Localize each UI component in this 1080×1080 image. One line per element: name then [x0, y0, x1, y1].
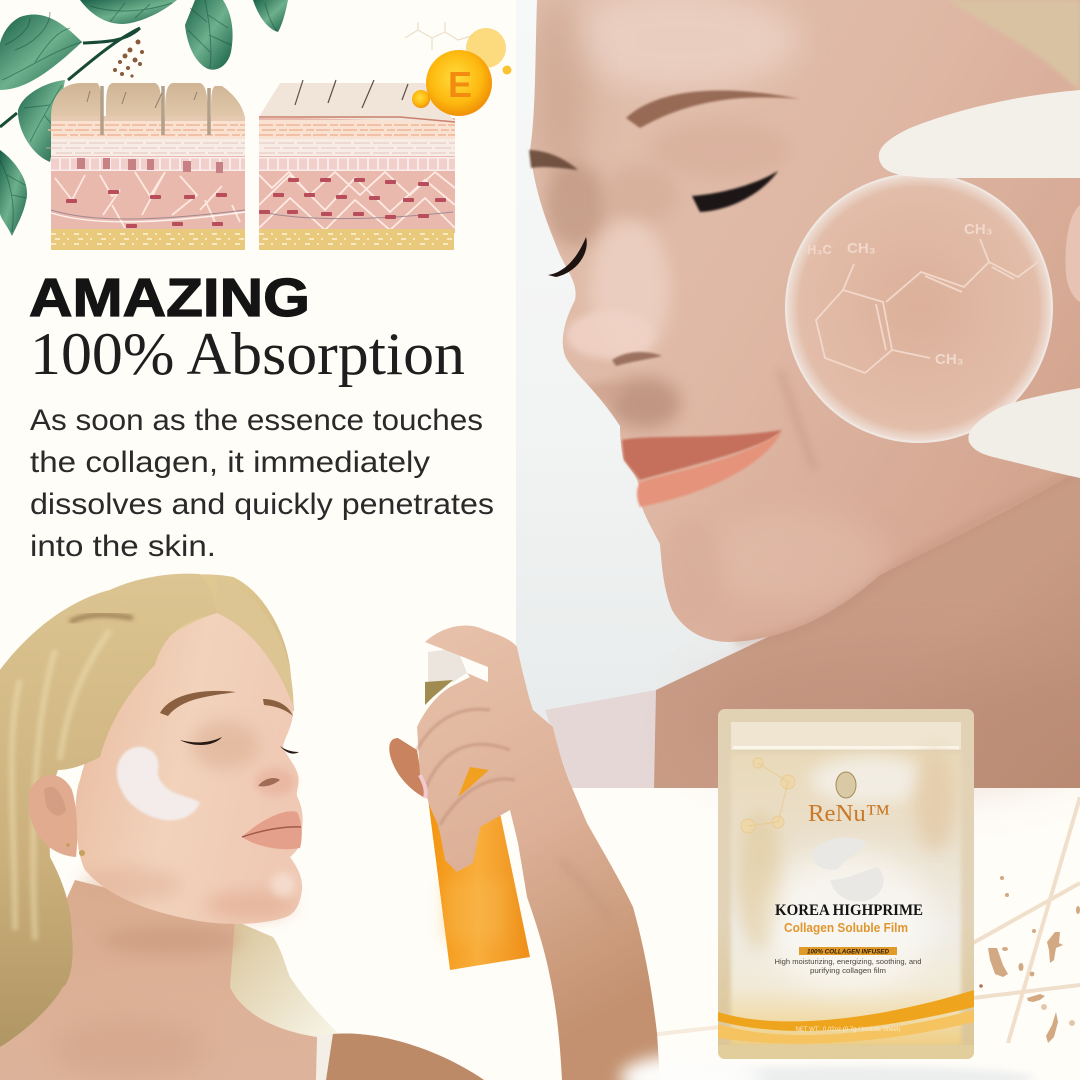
eye patches [812, 838, 866, 870]
jaw shadow line [735, 470, 1080, 642]
description: High moisturizing, energizing, soothing, and [774, 957, 922, 966]
hair back [0, 574, 294, 900]
brows and eyes [626, 91, 800, 128]
product pouch: purifying collagen film [810, 966, 886, 975]
lips [242, 811, 302, 849]
heading: 100% Absorption [30, 321, 465, 387]
face shading [530, 0, 890, 620]
body text: dissolves and quickly penetrates [30, 488, 494, 521]
product name: KOREA HIGHPRIME [775, 902, 923, 919]
hand and arm holding spray [389, 626, 660, 1080]
badge [799, 947, 897, 955]
heading: AMAZING [29, 268, 310, 328]
icon: vitamin E capsule: E [448, 64, 472, 105]
nostril [612, 352, 662, 366]
ear [28, 775, 77, 857]
face [75, 613, 303, 924]
decorative gold strokes and splatter [650, 797, 1080, 1043]
brows [160, 691, 236, 716]
net weight: NET WT.: 0.02oz (0.7g / Include Sheet) [796, 1026, 900, 1033]
product pouch [718, 709, 974, 1059]
skin diagram: after (restored) [259, 80, 455, 250]
lens: H₃C [807, 242, 832, 257]
photo: blonde woman applying spray [0, 574, 484, 1080]
gold waves [718, 990, 974, 1031]
leaf veins [0, 0, 277, 232]
tank strap [316, 1033, 333, 1080]
molecule graphic [741, 758, 795, 833]
hair front [0, 574, 217, 1047]
neck and shoulder [0, 880, 484, 1080]
neck [654, 460, 1080, 788]
cream patch [117, 747, 200, 820]
spray bottle [425, 648, 530, 970]
face shape [530, 0, 1080, 642]
botanical leaves [0, 0, 288, 236]
lobes [51, 83, 245, 121]
lens: CH₃ [847, 240, 876, 257]
photo: woman's face with magnifying lens [516, 0, 1080, 788]
product pouch: Collagen Soluble Film [784, 920, 908, 935]
hair [948, 0, 1080, 92]
skin diagram: before (damaged) [46, 83, 245, 250]
heading [29, 268, 465, 387]
lens: CH₃ [964, 221, 993, 238]
icon: vitamin E capsule [405, 22, 512, 116]
body text: the collagen, it immediately [30, 446, 430, 479]
hair wisp at neck [230, 920, 338, 1037]
gloved fingers [879, 90, 1080, 178]
white top strap [545, 690, 656, 788]
body text [30, 404, 494, 563]
logo: ReNu™ [808, 801, 890, 827]
floor shadow [620, 1054, 1035, 1080]
nostril [258, 778, 280, 786]
product pouch: 100% COLLAGEN INFUSED [807, 948, 889, 956]
ear [1066, 205, 1080, 302]
logo [808, 772, 890, 827]
closed eyes [180, 737, 222, 745]
lens: CH₃ [935, 351, 964, 368]
lips [622, 430, 782, 480]
lens [786, 174, 1052, 442]
body text: As soon as the essence touches [30, 404, 483, 437]
body text: into the skin. [30, 530, 216, 563]
